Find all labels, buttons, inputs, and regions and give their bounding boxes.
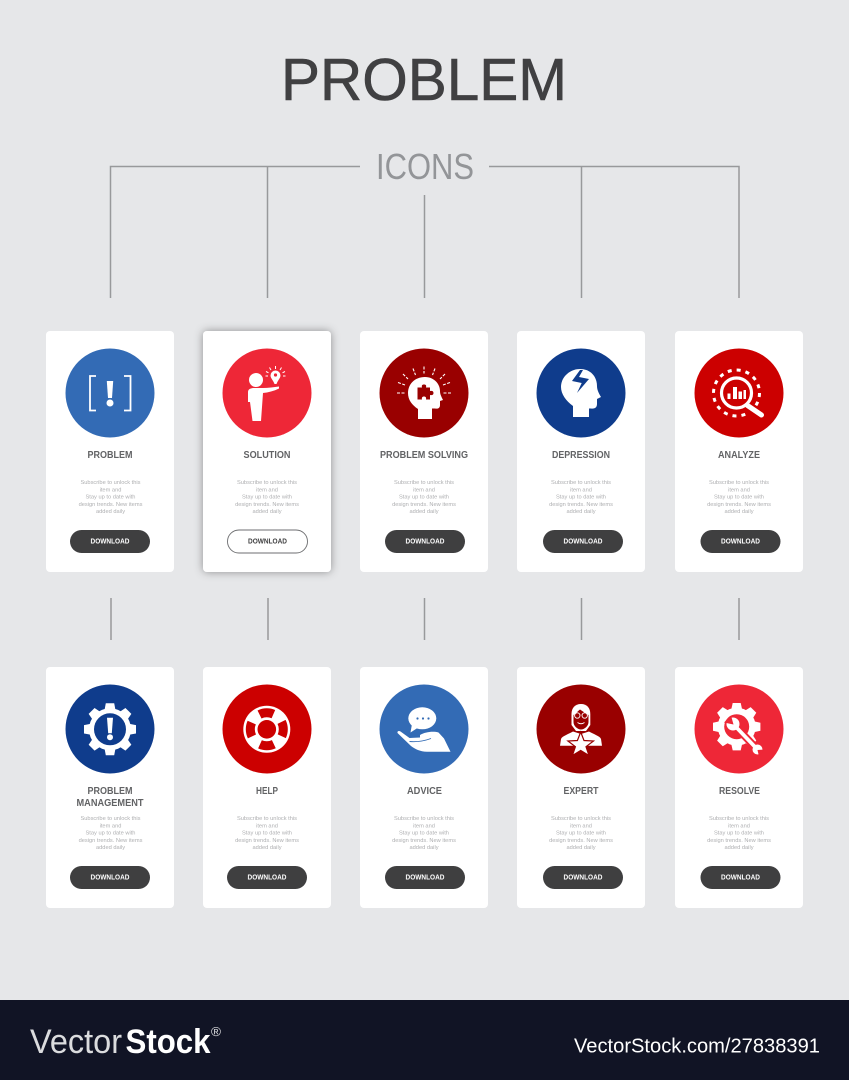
description: item and [256, 823, 278, 829]
description: design trends. New items [392, 502, 456, 508]
description: Stay up to date with [86, 495, 135, 501]
download button [543, 866, 623, 889]
icon circle: help [222, 684, 312, 774]
label: ADVICE [407, 786, 442, 797]
description: Stay up to date with [714, 831, 764, 837]
description: added daily [724, 509, 754, 515]
description: added daily [409, 509, 439, 515]
label: DEPRESSION [552, 450, 610, 461]
icon circle: problem solving [380, 348, 468, 438]
description: Stay up to date with [556, 495, 606, 501]
description: item and [570, 823, 592, 829]
download button [227, 866, 307, 889]
card: problem management [46, 667, 174, 908]
description: item and [256, 487, 278, 493]
description: Stay up to date with [242, 495, 292, 501]
card: problem solving [360, 331, 488, 572]
description: added daily [96, 509, 125, 515]
card: analyze [675, 331, 803, 572]
description: Subscribe to unlock this [709, 480, 769, 486]
description: design trends. New items [392, 838, 456, 844]
description: item and [728, 487, 750, 493]
label: PROBLEM [88, 450, 132, 461]
icon circle: depression [536, 348, 626, 438]
label: MANAGEMENT [76, 798, 144, 809]
description: design trends. New items [549, 838, 613, 844]
card: depression [517, 331, 645, 572]
download button outline [228, 530, 308, 553]
icon circle: solution [222, 348, 312, 438]
description: design trends. New items [79, 502, 143, 508]
label: PROBLEM SOLVING [380, 450, 468, 461]
label: SOLUTION [244, 450, 290, 461]
download button [70, 530, 150, 553]
description: Stay up to date with [714, 495, 764, 501]
description: added daily [252, 845, 282, 851]
description: added daily [96, 845, 125, 851]
subtitle: ICONS [376, 146, 474, 187]
download button: DOWNLOAD [90, 538, 130, 546]
label: ANALYZE [718, 450, 760, 461]
description: Stay up to date with [399, 495, 449, 501]
description: item and [100, 823, 121, 829]
icon circle: expert [536, 684, 626, 774]
logo: Vector [30, 1023, 122, 1061]
card: solution (highlighted) [203, 331, 331, 572]
description: Stay up to date with [242, 831, 292, 837]
image id: VectorStock.com/27838391 [574, 1036, 820, 1058]
description: Stay up to date with [86, 831, 135, 837]
label: EXPERT [564, 786, 598, 797]
download button: DOWNLOAD [248, 874, 286, 882]
download button: DOWNLOAD [721, 874, 760, 882]
card: expert [517, 667, 645, 908]
description: added daily [566, 509, 596, 515]
description: Subscribe to unlock this [237, 816, 297, 822]
logo: Stock [126, 1023, 211, 1061]
description: Subscribe to unlock this [237, 480, 297, 486]
description: added daily [566, 845, 596, 851]
description: item and [413, 487, 435, 493]
description: item and [100, 487, 121, 493]
description: Stay up to date with [399, 831, 449, 837]
title: PROBLEM [281, 47, 567, 113]
description: added daily [252, 509, 282, 515]
icon circle: advice [380, 684, 468, 774]
description: design trends. New items [707, 838, 771, 844]
download button [385, 866, 465, 889]
description: design trends. New items [79, 838, 143, 844]
icon circle: analyze [694, 348, 784, 438]
description: design trends. New items [707, 502, 771, 508]
description: Subscribe to unlock this [394, 480, 454, 486]
download button: DOWNLOAD [721, 538, 760, 546]
description: Subscribe to unlock this [80, 816, 141, 822]
download button [385, 530, 465, 553]
description: added daily [724, 845, 754, 851]
description: Subscribe to unlock this [551, 480, 611, 486]
icon circle: resolve [694, 684, 784, 774]
download button outline: DOWNLOAD [248, 538, 287, 546]
description: design trends. New items [235, 838, 299, 844]
download button: DOWNLOAD [564, 874, 602, 882]
card: problem [46, 331, 174, 572]
card: help [203, 667, 331, 908]
icon circle: problem management [66, 684, 154, 774]
top connector lines [110, 166, 739, 640]
description: Subscribe to unlock this [709, 816, 769, 822]
description: Subscribe to unlock this [551, 816, 611, 822]
download button: DOWNLOAD [90, 874, 130, 882]
label: RESOLVE [719, 786, 760, 797]
card: resolve [675, 667, 803, 908]
description: added daily [409, 845, 439, 851]
download button [700, 530, 780, 553]
description: item and [413, 823, 435, 829]
description: Subscribe to unlock this [80, 480, 141, 486]
download button [70, 866, 150, 889]
download button: DOWNLOAD [564, 538, 602, 546]
description: Stay up to date with [556, 831, 606, 837]
description: Subscribe to unlock this [394, 816, 454, 822]
download button: DOWNLOAD [406, 874, 444, 882]
icon circle: problem [66, 348, 154, 438]
label: PROBLEM [88, 786, 132, 797]
download button: DOWNLOAD [406, 538, 444, 546]
card: advice [360, 667, 488, 908]
footer band [0, 1000, 849, 1080]
download button [543, 530, 623, 553]
description: item and [728, 823, 750, 829]
download button [700, 866, 780, 889]
label: HELP [256, 786, 278, 797]
description: design trends. New items [235, 502, 299, 508]
logo [30, 1023, 221, 1061]
description: design trends. New items [549, 502, 613, 508]
logo: ® [211, 1024, 221, 1039]
description: item and [570, 487, 592, 493]
